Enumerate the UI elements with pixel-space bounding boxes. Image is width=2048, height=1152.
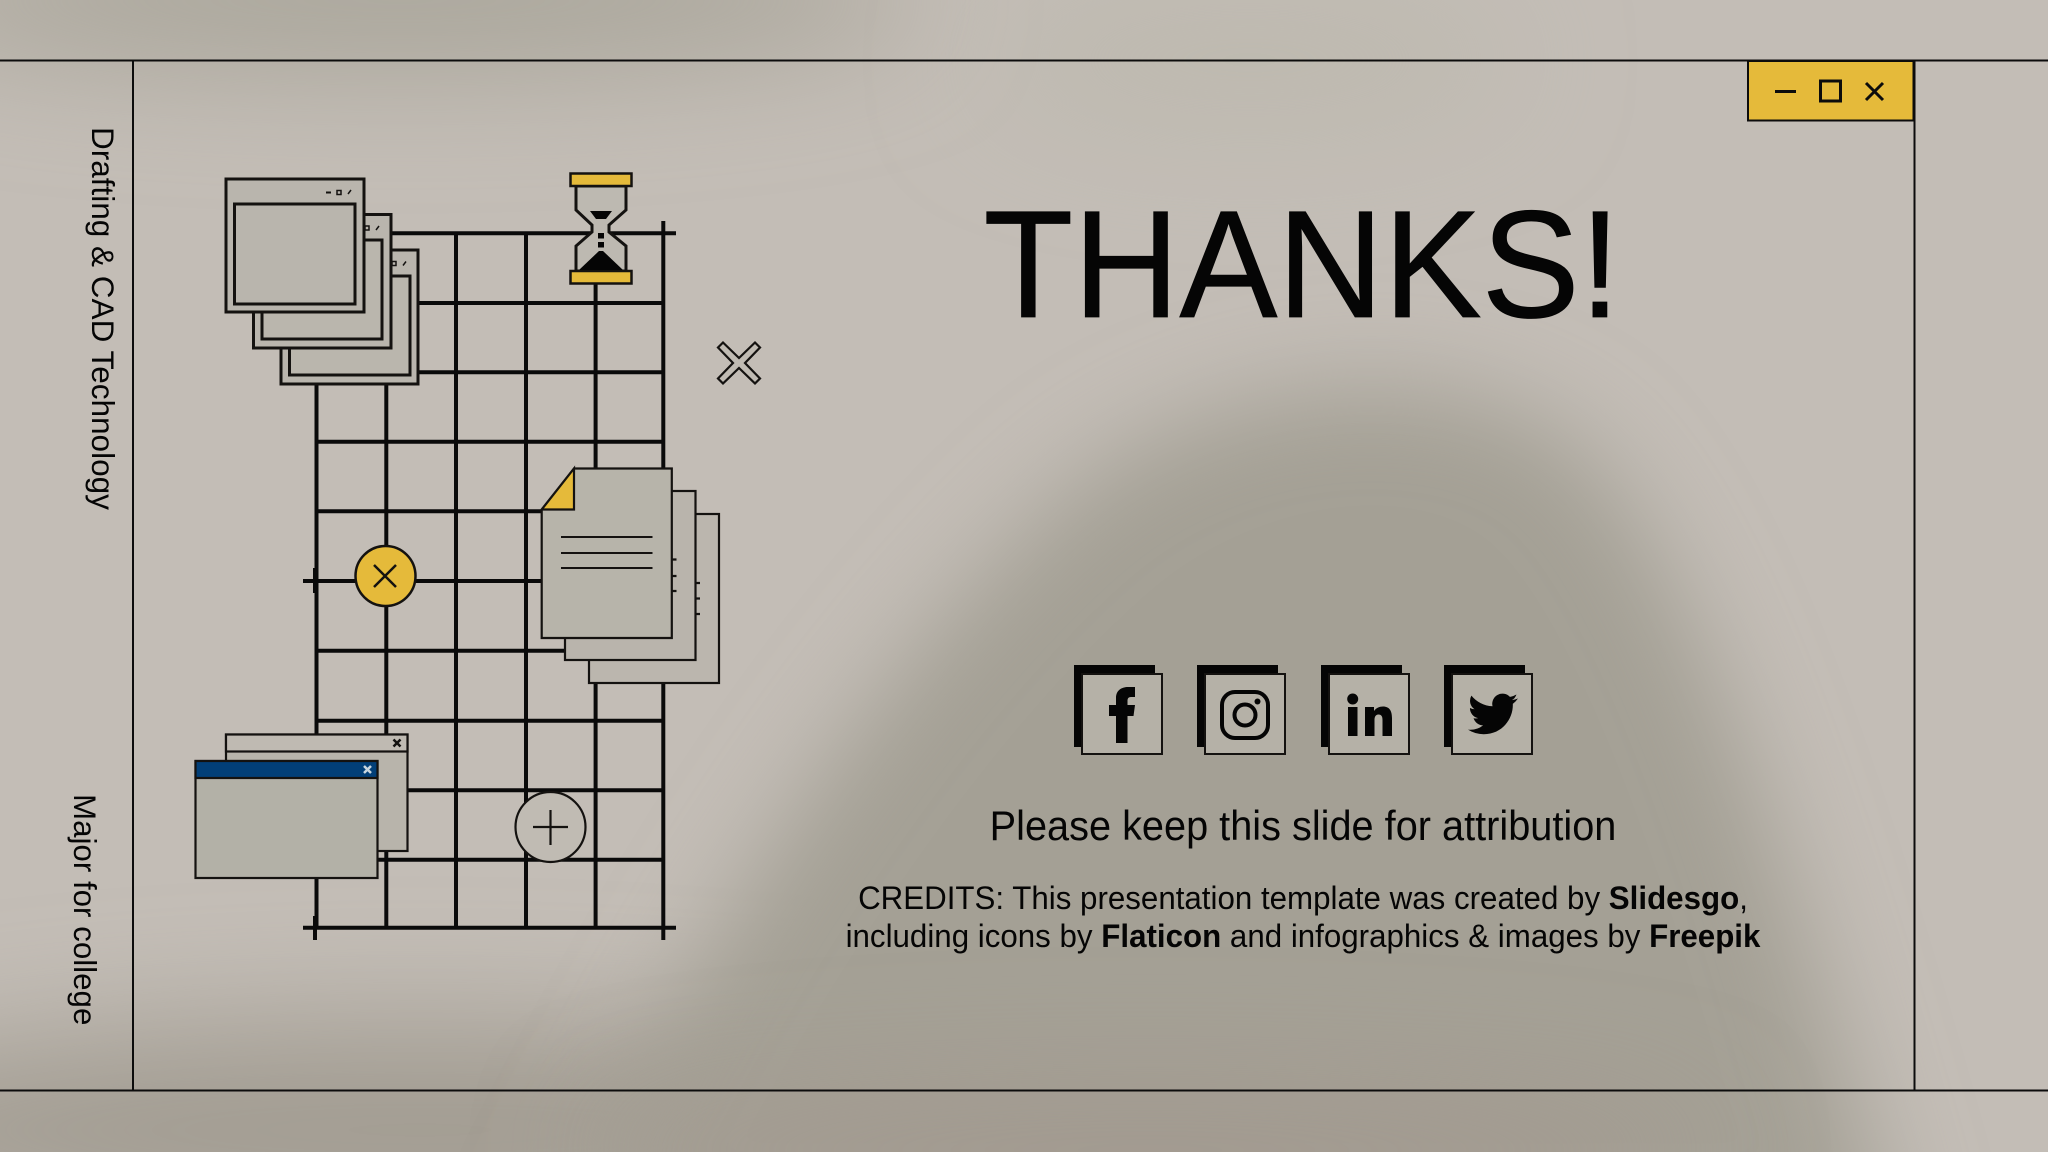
stacked documents [542,468,719,683]
icon: linkedin [1321,665,1409,754]
credits text: CREDITS: This presentation template was created by Slidesgo, [858,879,1748,916]
illustration: CAD grid with windows and documents [196,174,760,940]
vertical label: Major for college: Major for college [67,794,102,1025]
icon: facebook [1074,665,1162,754]
icon: twitter [1444,665,1532,754]
attribution line: Please keep this slide for attribution [990,802,1616,849]
icon: plus button [516,792,586,862]
icon: hourglass [570,174,632,284]
stacked dialog windows, bottom left [196,734,408,878]
icon: instagram [1197,665,1285,754]
vertical label: Drafting & CAD Technology: Drafting & CAD Technology [85,127,121,510]
window controls: minimise, maximise, close [1748,61,1914,120]
social icons row [1074,665,1532,754]
credits text [846,879,1761,954]
drafting grid [303,221,676,940]
credits text: including icons by Flaticon and infographics & images by Freepik [846,917,1761,954]
title: THANKS! [983,178,1621,350]
icon: outlined X [718,342,760,384]
icon: yellow close button [356,546,416,606]
stacked windows, top left [226,179,418,384]
